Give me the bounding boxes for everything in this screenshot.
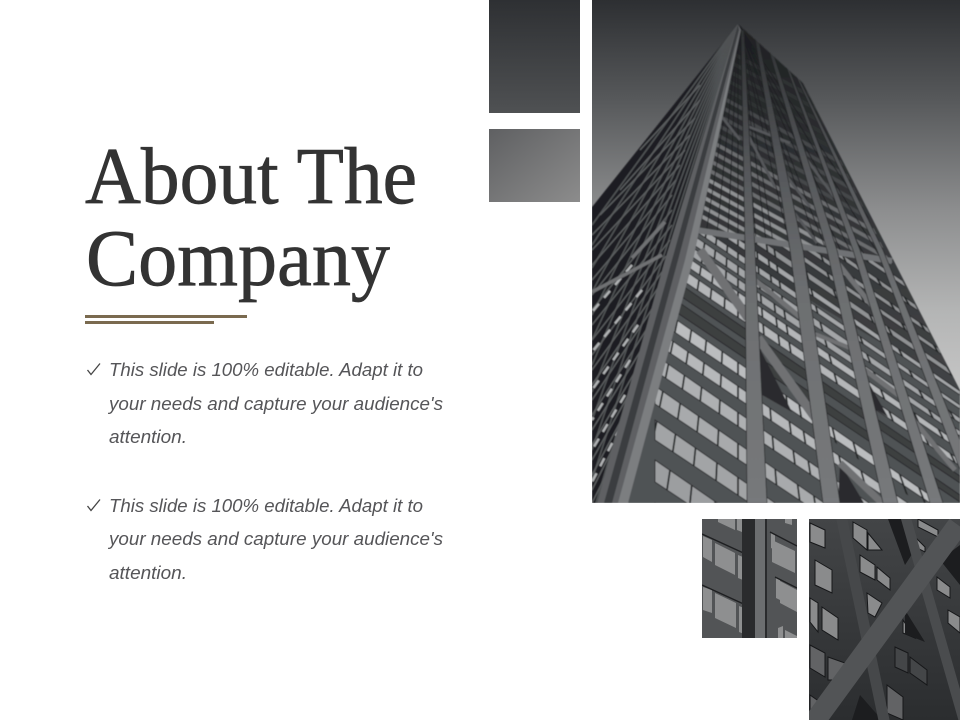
dark gradient square (489, 0, 580, 113)
dark wedges under braces (757, 345, 888, 503)
grey gradient square (489, 129, 580, 202)
bullet paragraph 1: This slide is 100% editable. Adapt it to (109, 360, 423, 380)
bullet paragraph 2: attention. (109, 563, 187, 583)
windows (810, 519, 960, 640)
diagonal braces (700, 250, 955, 503)
title underline (85, 315, 247, 324)
upper mullions (706, 54, 878, 255)
vertical columns (741, 30, 960, 503)
icon: check mark 2 (88, 500, 100, 510)
title: About The (85, 133, 417, 221)
bullet paragraph 2: your needs and capture your audience's (107, 529, 443, 549)
columns and diagonal brace (812, 515, 960, 720)
photo: skyscraper (592, 0, 960, 503)
horizontal girder (696, 230, 892, 261)
bullet paragraph 2 (107, 496, 443, 583)
bullet paragraph 1: your needs and capture your audience's (107, 394, 443, 414)
upper window rows (702, 56, 888, 258)
corner column (597, 24, 741, 503)
right building face (628, 24, 960, 503)
left building face (592, 24, 738, 503)
bullet paragraph 2: This slide is 100% editable. Adapt it to (109, 496, 423, 516)
title: Company (86, 215, 390, 303)
bullet text block 2 (88, 496, 443, 583)
photo crop: building detail right (809, 515, 960, 720)
icon: check mark 1 (88, 364, 100, 374)
lower window rows (634, 233, 960, 503)
photo crop: building detail left (702, 519, 797, 638)
bullet paragraph 1: attention. (109, 427, 187, 447)
bullet paragraph 1 (107, 360, 443, 447)
lower mullions (654, 234, 956, 503)
bullet text block 1 (88, 360, 443, 447)
title (85, 133, 417, 303)
